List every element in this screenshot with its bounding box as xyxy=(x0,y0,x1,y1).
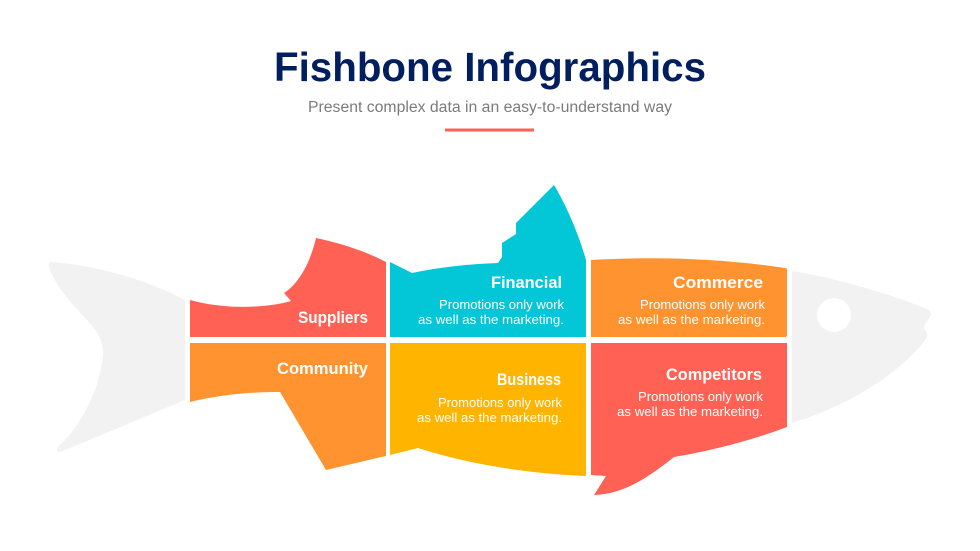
panel: suppliers xyxy=(190,238,386,337)
text: business description: as well as the marketing. xyxy=(417,410,562,425)
heading: business: Business xyxy=(497,370,561,389)
icon: fish eye xyxy=(817,298,851,332)
subtitle: Present complex data in an easy-to-understand way xyxy=(308,99,672,116)
text: financial description xyxy=(418,297,564,327)
panel: competitors xyxy=(591,343,787,495)
heading: financial: Financial xyxy=(491,273,562,292)
text: commerce description: Promotions only work xyxy=(640,297,765,312)
panel: community xyxy=(190,343,386,470)
text: business description: Promotions only work xyxy=(438,395,562,410)
panel: commerce xyxy=(591,258,787,337)
text: competitors description xyxy=(617,389,763,419)
fish head xyxy=(792,271,931,423)
heading: commerce: Commerce xyxy=(673,273,763,292)
text: business description xyxy=(417,395,562,425)
heading: suppliers: Suppliers xyxy=(298,308,368,327)
text: competitors description: as well as the marketing. xyxy=(617,404,763,419)
text: commerce description: as well as the marketing. xyxy=(618,312,765,327)
title underline accent xyxy=(445,128,534,132)
text: financial description: as well as the marketing. xyxy=(418,312,564,327)
heading: competitors: Competitors xyxy=(666,365,762,384)
text: commerce description xyxy=(618,297,765,327)
heading: community: Community xyxy=(277,359,369,378)
title: Fishbone Infographics xyxy=(274,44,706,90)
text: financial description: Promotions only work xyxy=(439,297,564,312)
panel: business xyxy=(390,343,586,476)
text: competitors description: Promotions only work xyxy=(638,389,763,404)
fish tail xyxy=(49,262,185,452)
panel: financial xyxy=(390,185,586,337)
